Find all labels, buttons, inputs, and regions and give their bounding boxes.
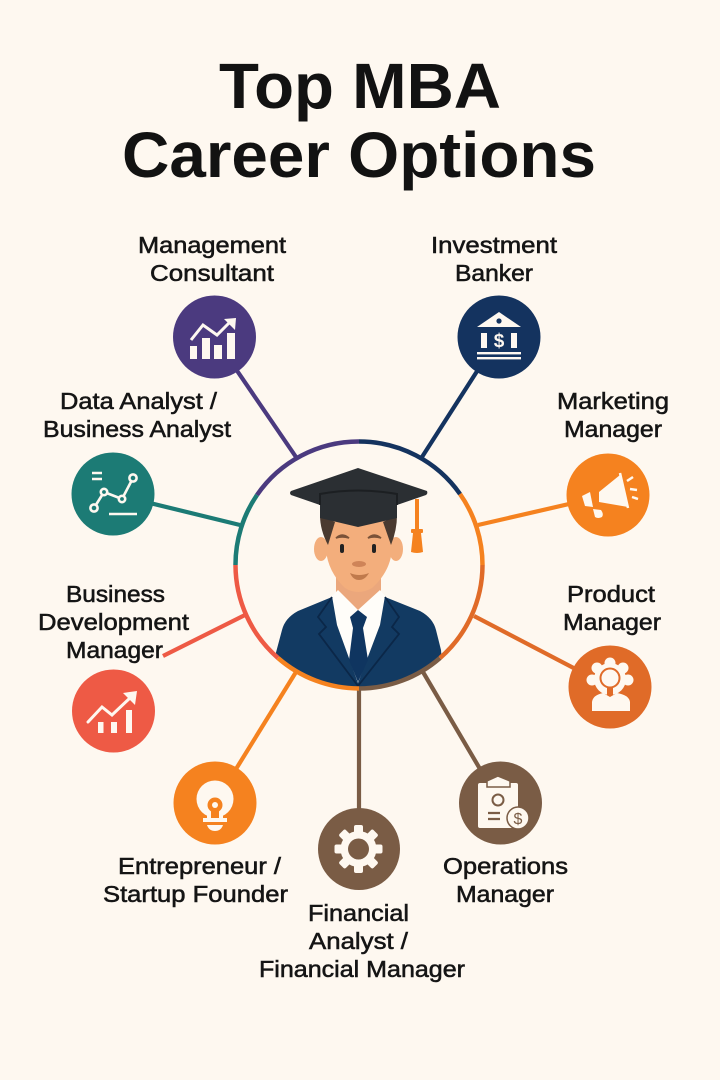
tassel [411, 499, 423, 553]
segmented ring [235, 441, 482, 688]
icon: bank: $ [494, 331, 505, 352]
suit [276, 578, 442, 686]
node: Data Analyst / Business Analyst [43, 388, 232, 536]
hair [320, 515, 397, 545]
title: Top MBA [219, 50, 501, 122]
node: Entrepreneur / Startup Founder: Startup Founder [103, 881, 288, 907]
icon: clipboard with dollar: $ [514, 811, 523, 828]
icon: gear [334, 825, 382, 873]
node: Investment Banker: Investment [431, 232, 558, 258]
icon: bar chart with arrow [190, 318, 236, 359]
node: Operations Manager: Manager [456, 881, 554, 907]
node: Marketing Manager: Marketing [557, 388, 669, 414]
node: Data Analyst / Business Analyst: Business Analyst [43, 416, 232, 442]
icon: bank [477, 312, 521, 359]
node: Management Consultant: Management [138, 232, 287, 258]
node: Business Development Manager: Business [66, 581, 165, 607]
node: Investment Banker [431, 232, 558, 378]
icon: clipboard with dollar [478, 776, 529, 829]
node: Management Consultant [138, 232, 287, 378]
central portrait: graduate [274, 468, 445, 700]
node: Financial Analyst / Financial Manager: Analyst / [309, 928, 409, 954]
node: Entrepreneur / Startup Founder [103, 762, 288, 907]
node: Operations Manager: Operations [443, 853, 568, 879]
icon: line graph [90, 473, 137, 514]
node: Management Consultant: Consultant [150, 260, 275, 286]
ears [314, 537, 328, 561]
mortarboard cap [290, 468, 427, 527]
node: Business Development Manager [38, 581, 190, 752]
node: Financial Analyst / Financial Manager: Financial Manager [259, 956, 465, 982]
node: Product Manager: Product [567, 581, 656, 607]
node: Entrepreneur / Startup Founder: Entrepreneur / [118, 853, 282, 879]
node: Product Manager: Manager [563, 609, 661, 635]
node: Investment Banker: Banker [455, 260, 533, 286]
icon: gear with person [586, 658, 634, 711]
node: Business Development Manager: Manager [66, 637, 163, 663]
title [122, 50, 596, 191]
node: Business Development Manager: Development [38, 609, 190, 635]
face [326, 515, 392, 592]
icon: light bulb [196, 780, 234, 831]
node: Data Analyst / Business Analyst: Data Analyst / [60, 388, 218, 414]
icon: megaphone [582, 473, 638, 518]
icon: growth chart [88, 691, 137, 733]
node: Marketing Manager [557, 388, 669, 536]
node: Product Manager [563, 581, 661, 728]
node: Financial Analyst / Financial Manager [259, 808, 465, 982]
node: Marketing Manager: Manager [564, 416, 662, 442]
node: Financial Analyst / Financial Manager: Financial [308, 900, 409, 926]
node: Operations Manager [443, 762, 568, 907]
facial features [336, 535, 381, 580]
title: Career Options [122, 119, 596, 191]
connector lines [113, 337, 610, 849]
